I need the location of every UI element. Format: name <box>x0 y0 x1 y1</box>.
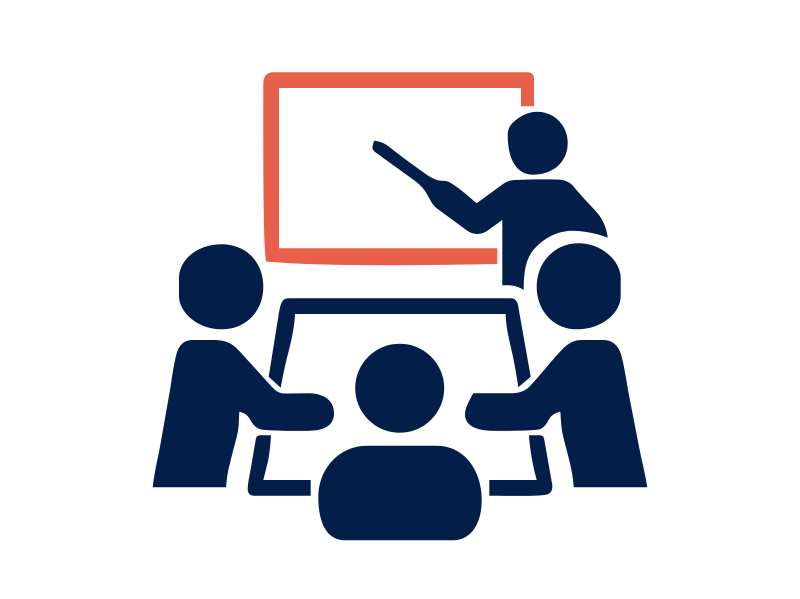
meeting table <box>248 298 552 496</box>
table lower right edge <box>489 435 552 496</box>
right attendee body and arm <box>465 340 647 487</box>
center attendee body <box>318 446 482 540</box>
presenter figure <box>372 112 608 290</box>
right attendee <box>465 243 647 487</box>
left attendee head <box>179 244 263 329</box>
center attendee head <box>355 344 444 433</box>
table lower left edge <box>248 435 311 496</box>
center attendee <box>318 344 482 540</box>
left attendee <box>153 244 334 487</box>
table top edge <box>269 298 531 388</box>
presenter body and pointer <box>372 141 608 290</box>
presenter head <box>508 112 568 175</box>
left attendee body and arm <box>153 340 334 487</box>
whiteboard frame <box>263 72 534 265</box>
right attendee head <box>537 243 621 329</box>
